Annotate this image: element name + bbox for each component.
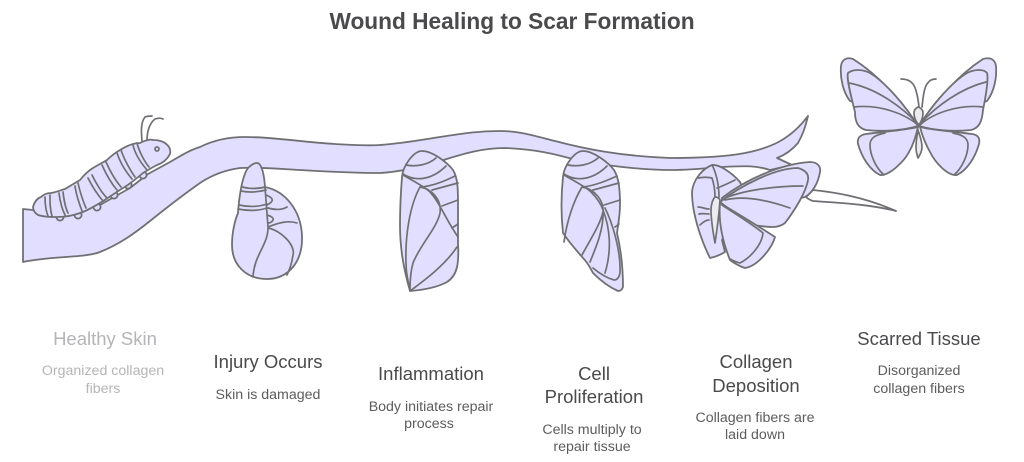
label: healthy skin: Organized collagen xyxy=(42,363,164,379)
label: healthy skin xyxy=(42,328,164,397)
label: cell proliferation: repair tissue xyxy=(553,439,631,455)
title: Wound Healing to Scar Formation xyxy=(329,8,695,34)
label: collagen deposition: Collagen fibers are xyxy=(695,410,815,426)
label: scarred tissue: Disorganized xyxy=(878,363,960,379)
branch xyxy=(23,116,896,262)
label: inflammation: Body initiates repair xyxy=(369,399,494,415)
label: scarred tissue xyxy=(857,328,981,397)
label: cell proliferation: Cell xyxy=(578,363,610,384)
label: collagen deposition: laid down xyxy=(725,427,785,443)
label: inflammation xyxy=(369,363,494,432)
label: cell proliferation: Proliferation xyxy=(545,386,643,407)
icon: chrysalis opening xyxy=(562,151,623,291)
label: collagen deposition: Collagen xyxy=(719,351,793,372)
label: cell proliferation xyxy=(542,363,643,455)
label: cell proliferation: Cells multiply to xyxy=(542,422,642,438)
icon: emerging butterfly xyxy=(692,162,820,268)
label: healthy skin: Healthy Skin xyxy=(53,328,157,349)
icon: caterpillar xyxy=(33,116,170,221)
label: scarred tissue: collagen fibers xyxy=(873,381,965,397)
label: collagen deposition xyxy=(695,351,815,443)
icon: chrysalis xyxy=(400,151,458,291)
label: inflammation: Inflammation xyxy=(378,363,484,384)
label: healthy skin: fibers xyxy=(86,381,120,397)
label: injury occurs: Skin is damaged xyxy=(216,387,320,403)
icon: butterfly xyxy=(841,58,996,175)
label: inflammation: process xyxy=(404,416,454,432)
label: scarred tissue: Scarred Tissue xyxy=(857,328,981,349)
label: injury occurs xyxy=(214,351,322,403)
icon: curled chrysalis xyxy=(232,163,302,279)
label: collagen deposition: Deposition xyxy=(712,375,800,396)
label: injury occurs: Injury Occurs xyxy=(214,351,322,372)
